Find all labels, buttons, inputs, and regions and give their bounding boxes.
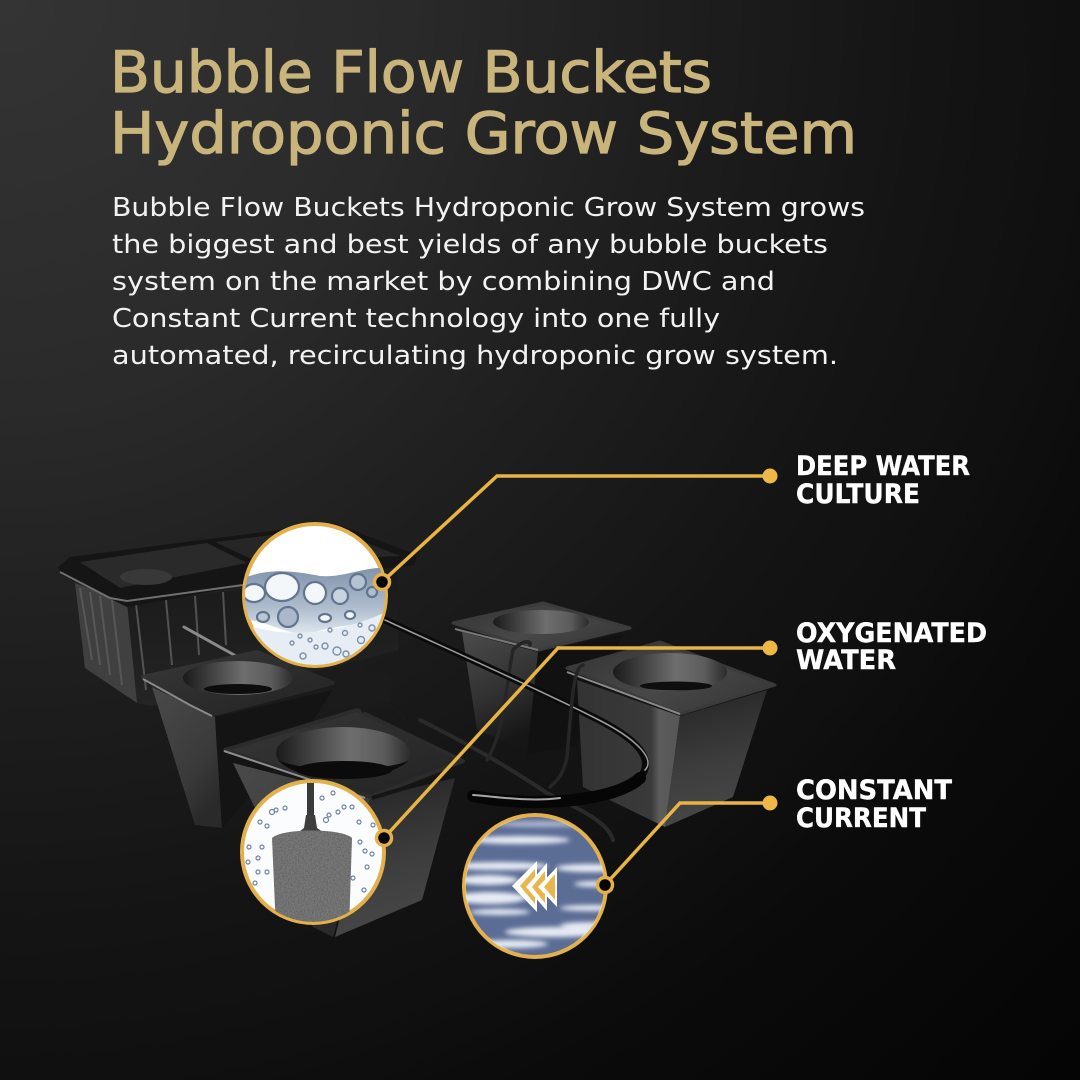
air and water tubes, behind right bucket <box>420 642 613 840</box>
pump box <box>320 672 393 712</box>
callout line: constant current <box>605 803 770 885</box>
main manifold tube <box>385 620 648 802</box>
back-center bucket <box>453 603 630 755</box>
product: hydroponic bucket system <box>58 523 775 937</box>
back-left bucket <box>143 652 333 828</box>
label: deep water culture <box>796 451 970 510</box>
label: constant current <box>796 775 953 834</box>
label: oxygenated water <box>796 618 987 676</box>
intro text <box>112 193 865 371</box>
title: Hydroponic Grow System <box>110 101 857 167</box>
back air tube <box>184 627 236 656</box>
label: oxygenated water: OXYGENATED <box>796 618 987 649</box>
intro text: system on the market by combining DWC and <box>112 267 775 297</box>
label: oxygenated water: WATER <box>796 645 896 676</box>
circle: water current <box>462 813 608 959</box>
title <box>110 40 857 167</box>
circle: bubbles <box>240 524 390 670</box>
circle: air stone <box>242 781 384 930</box>
label: deep water culture: DEEP WATER <box>796 451 970 482</box>
callout line: deep water culture <box>382 476 770 582</box>
callout dots on circles <box>374 574 612 892</box>
title: Bubble Flow Buckets <box>110 40 712 106</box>
intro text: automated, recirculating hydroponic grow system. <box>112 341 838 371</box>
reservoir tank <box>58 523 417 706</box>
intro text: the biggest and best yields of any bubble buckets <box>112 230 828 260</box>
right bucket <box>567 642 775 827</box>
label: constant current: CONSTANT <box>796 775 953 806</box>
icon: triple chevrons <box>512 861 557 912</box>
front bucket <box>224 704 464 937</box>
callout line: oxygenated water <box>384 648 770 838</box>
label: deep water culture: CULTURE <box>796 479 920 510</box>
callout end dots <box>762 468 778 810</box>
intro text: Constant Current technology into one fully <box>112 304 720 334</box>
label: constant current: CURRENT <box>796 803 927 834</box>
intro text: Bubble Flow Buckets Hydroponic Grow System grows <box>112 193 865 223</box>
